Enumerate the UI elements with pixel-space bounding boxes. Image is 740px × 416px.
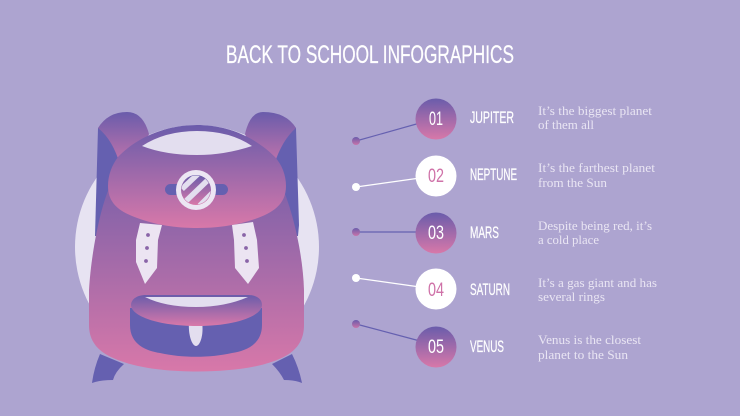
item 2: Neptune: 02 bbox=[428, 166, 444, 187]
buckle ring bbox=[176, 170, 216, 210]
item 4: Saturn bbox=[352, 268, 657, 310]
item 5: Venus: planet to the Sun bbox=[538, 347, 628, 362]
item 5: Venus: Venus is the closest bbox=[538, 332, 641, 347]
item 1: Jupiter bbox=[352, 98, 652, 145]
item 1: Jupiter: JUPITER bbox=[470, 109, 514, 127]
item 3: Mars: 03 bbox=[428, 223, 444, 244]
left shoulder strap bbox=[95, 112, 149, 236]
right strap tab bbox=[232, 222, 259, 284]
illustration: backpack bbox=[75, 112, 319, 383]
item 2: Neptune: It’s the farthest planet bbox=[538, 160, 655, 175]
item 3: Mars: a cold place bbox=[538, 232, 599, 247]
pocket tab bbox=[189, 322, 203, 346]
right shoulder strap bbox=[245, 112, 299, 236]
item 2: Neptune: from the Sun bbox=[538, 175, 607, 190]
item 4: Saturn: several rings bbox=[538, 289, 605, 304]
backdrop circle bbox=[75, 125, 319, 369]
item 2: Neptune bbox=[352, 156, 655, 196]
item 3: Mars bbox=[352, 212, 652, 254]
pocket flap bbox=[131, 295, 262, 326]
item 1: Jupiter: 01 bbox=[429, 109, 443, 130]
item 3: Mars: Despite being red, it’s bbox=[538, 218, 652, 233]
item 1: Jupiter: It’s the biggest planet bbox=[538, 103, 652, 118]
item 5: Venus: VENUS bbox=[470, 338, 504, 356]
item 4: Saturn: 04 bbox=[428, 280, 444, 301]
item 4: Saturn: It’s a gas giant and has bbox=[538, 275, 657, 290]
left strap tab bbox=[136, 223, 162, 284]
title: BACK TO SCHOOL INFOGRAPHICS bbox=[226, 41, 514, 69]
item 5: Venus: 05 bbox=[428, 337, 444, 358]
item 2: Neptune: NEPTUNE bbox=[470, 166, 517, 184]
handle opening bbox=[142, 131, 252, 155]
buckle bar bbox=[165, 184, 228, 195]
item 5: Venus bbox=[352, 320, 641, 368]
pocket opening bbox=[145, 297, 248, 307]
icon: left foot bbox=[92, 354, 124, 383]
backpack body bbox=[89, 182, 304, 372]
icon: right foot bbox=[272, 354, 302, 383]
top flap bbox=[108, 125, 286, 228]
item 1: Jupiter: of them all bbox=[538, 117, 594, 132]
item 4: Saturn: SATURN bbox=[470, 281, 510, 299]
item 3: Mars: MARS bbox=[470, 224, 499, 242]
front pocket bbox=[130, 308, 262, 357]
